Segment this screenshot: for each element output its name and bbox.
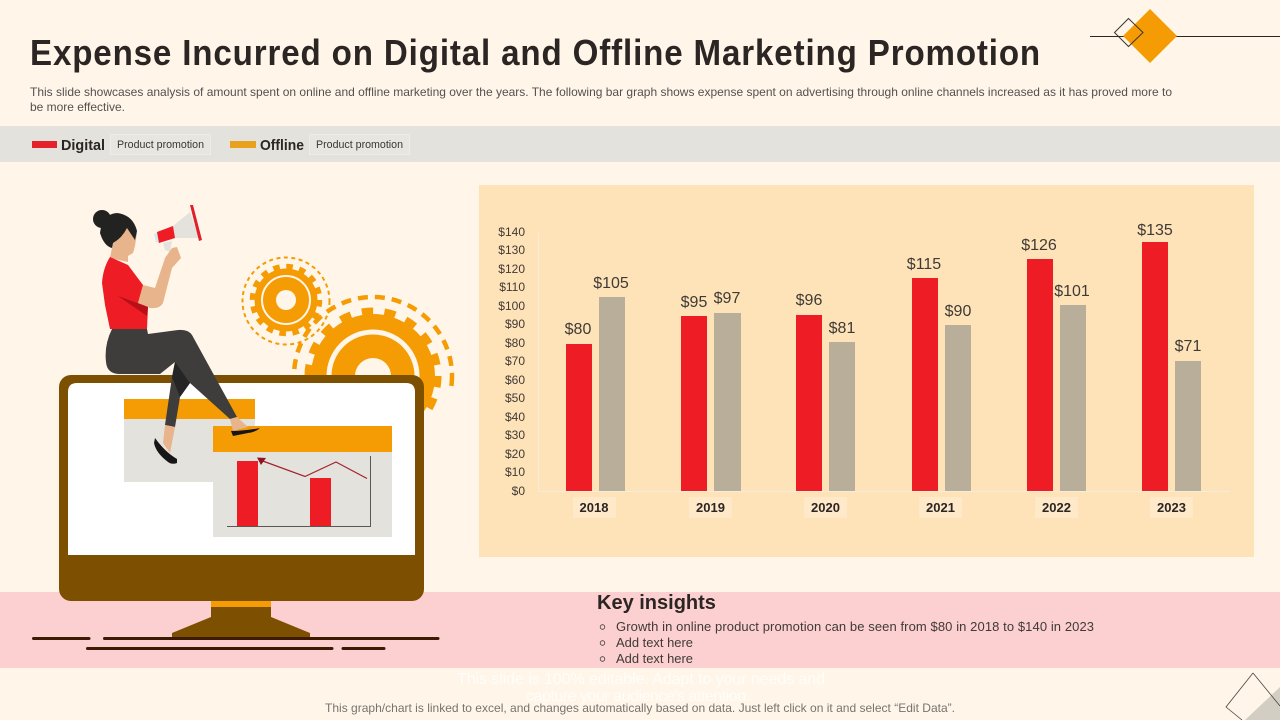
bar value labels: $80 <box>565 321 591 338</box>
bar value labels: $135 <box>1137 222 1173 239</box>
chart y axis: $80 <box>505 336 525 350</box>
year labels: 2023 <box>1157 500 1186 515</box>
faint editable note <box>457 671 825 705</box>
legend: offline: Offline <box>260 137 304 154</box>
chart y axis: $20 <box>505 447 525 461</box>
monitor stand <box>172 601 310 637</box>
bar value labels <box>565 222 1201 355</box>
faint editable note: capture your audience's attention. <box>526 688 750 705</box>
bars: offline <box>599 297 1201 491</box>
panel: bar chart <box>479 185 1254 557</box>
footer note: This graph/chart is linked to excel, and changes automatically based on data. Just left click on it and select “Edit Data”. <box>325 701 955 715</box>
year labels: 2021 <box>926 500 955 515</box>
dark trousers <box>106 329 237 427</box>
legend: offline: Product promotion <box>316 139 403 151</box>
key insights text <box>597 592 1094 666</box>
chart y axis: $100 <box>498 299 525 313</box>
arm and hand <box>138 247 181 308</box>
chart y axis: $140 <box>498 225 525 239</box>
bar value labels: $96 <box>796 292 822 309</box>
chart y axis: $40 <box>505 410 525 424</box>
icon: bottom-right diamonds <box>1226 673 1280 720</box>
red shirt <box>102 257 148 329</box>
bar value labels: $126 <box>1021 237 1057 254</box>
illustration: woman with megaphone <box>93 205 260 464</box>
year labels: 2018 <box>580 500 608 515</box>
icon: small gear <box>242 258 330 344</box>
ground lines <box>34 638 438 648</box>
bar value labels: $101 <box>1054 283 1090 300</box>
chart y axis: $120 <box>498 262 525 276</box>
legend: offline <box>230 134 410 154</box>
bar value labels: $95 <box>681 294 707 311</box>
chart y axis: $10 <box>505 465 525 479</box>
bullet list: Add text here <box>616 635 693 650</box>
megaphone <box>154 205 202 252</box>
bar value labels: $71 <box>1175 338 1201 355</box>
bullet list <box>600 619 1094 666</box>
icon: top-right diamonds with line <box>1090 9 1280 63</box>
icon: monitor with on-screen chart <box>59 375 424 637</box>
bullet list: Growth in online product promotion can be seen from $80 in 2018 to $140 in 2023 <box>616 619 1094 634</box>
description text: be more effective. <box>30 100 125 114</box>
bar value labels: $97 <box>714 290 740 307</box>
bars: digital <box>566 242 1168 491</box>
legend: digital <box>32 134 210 154</box>
description text: This slide showcases analysis of amount spent on online and offline marketing over the years. The following bar graph shows expense spent on advertising through online channels increased as it has proved more to <box>30 85 1172 99</box>
on-screen window back <box>124 399 255 482</box>
chart y axis <box>498 225 1230 498</box>
description text <box>30 85 1172 114</box>
bar value labels: $81 <box>829 320 855 337</box>
title: Expense Incurred on Digital and Offline Marketing Promotion <box>30 34 1040 73</box>
year labels: 2022 <box>1042 500 1071 515</box>
chart y axis: $70 <box>505 354 525 368</box>
chart y axis: $130 <box>498 243 525 257</box>
faint editable note: This slide is 100% editable. Adapt to your needs and <box>457 671 825 688</box>
bar value labels: $105 <box>593 275 629 292</box>
key insights text: Key insights <box>597 592 716 614</box>
bar value labels: $115 <box>907 256 941 273</box>
year labels: 2020 <box>811 500 840 515</box>
on-screen chart window <box>213 426 392 537</box>
head and hair <box>93 210 137 262</box>
legend: digital: Product promotion <box>117 139 204 151</box>
chart y axis: $110 <box>499 280 525 294</box>
chart y axis: $50 <box>505 391 525 405</box>
legend band <box>0 126 1280 162</box>
chart y axis: $0 <box>512 484 525 498</box>
panel: key insights band <box>0 592 1280 668</box>
year labels: 2019 <box>696 500 725 515</box>
icon: large gear <box>292 294 454 412</box>
feet and shoes <box>154 417 260 464</box>
legend: digital: Digital <box>61 137 105 154</box>
bullet list: Add text here <box>616 651 693 666</box>
year labels <box>573 497 1193 518</box>
chart y axis: $60 <box>505 373 525 387</box>
chart y axis: $90 <box>505 317 525 331</box>
bar value labels: $90 <box>945 303 971 320</box>
chart y axis: $30 <box>505 428 525 442</box>
